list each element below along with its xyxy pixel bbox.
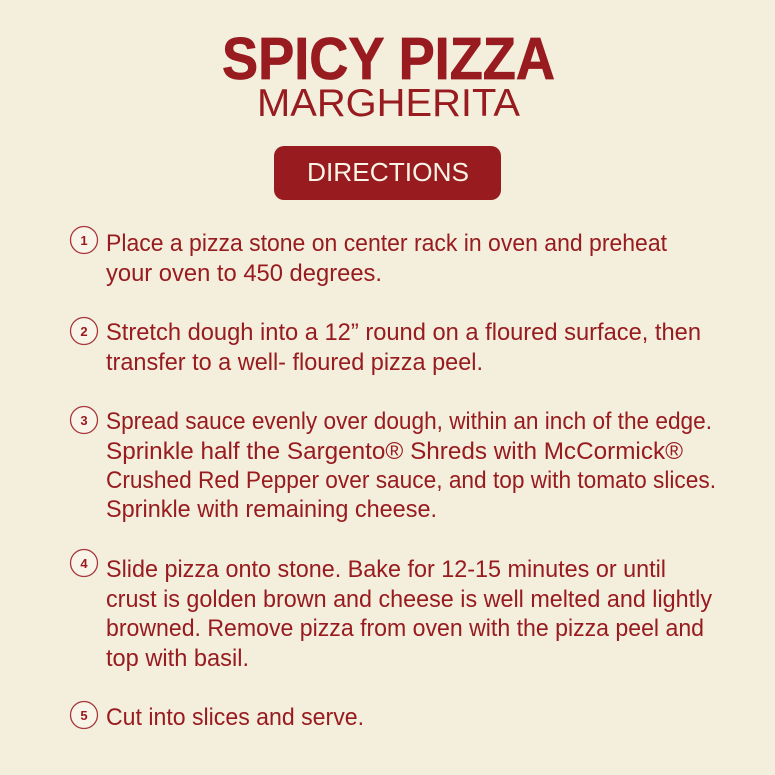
step 4 text: crust is golden brown and cheese is well melted and lightly bbox=[106, 586, 712, 613]
step 2 bbox=[70, 318, 701, 376]
step 4 text bbox=[106, 556, 712, 672]
icon: number 3 bbox=[70, 406, 98, 434]
icon: number 5: 5 bbox=[80, 708, 88, 723]
step 1 text: Place a pizza stone on center rack in oven and preheat bbox=[106, 230, 667, 257]
step 5 bbox=[70, 702, 364, 731]
step 4 text: Slide pizza onto stone. Bake for 12-15 minutes or until bbox=[106, 556, 666, 583]
icon: number 4 bbox=[70, 550, 98, 576]
heading: directions badge bbox=[274, 146, 501, 200]
heading: directions badge: DIRECTIONS bbox=[307, 159, 469, 187]
title: MARGHERITA bbox=[257, 82, 520, 125]
step 2 text bbox=[106, 319, 701, 376]
step 3 bbox=[70, 406, 716, 523]
step 1 text bbox=[106, 230, 667, 287]
step 4 bbox=[70, 550, 712, 672]
icon: number 5 bbox=[70, 702, 98, 728]
step 2 text: Stretch dough into a 12” round on a floured surface, then bbox=[106, 319, 701, 346]
step 3 text: Sprinkle half the Sargento® Shreds with McCormick® bbox=[106, 438, 683, 465]
step 2 text: transfer to a well- floured pizza peel. bbox=[106, 349, 483, 376]
icon: number 1: 1 bbox=[80, 233, 88, 248]
step 1 text: your oven to 450 degrees. bbox=[106, 260, 382, 287]
step 3 text: Crushed Red Pepper over sauce, and top with tomato slices. bbox=[106, 467, 716, 494]
icon: number 4: 4 bbox=[80, 556, 88, 571]
icon: number 3: 3 bbox=[80, 413, 88, 428]
step 1 bbox=[70, 226, 667, 287]
step 4 text: browned. Remove pizza from oven with the pizza peel and bbox=[106, 615, 704, 642]
title: SPICY PIZZA bbox=[222, 26, 555, 92]
icon: number 2: 2 bbox=[80, 324, 88, 339]
step 3 text: Sprinkle with remaining cheese. bbox=[106, 496, 437, 523]
step 3 text: Spread sauce evenly over dough, within an inch of the edge. bbox=[106, 408, 712, 435]
icon: number 2 bbox=[70, 318, 98, 344]
step 3 text bbox=[106, 408, 716, 523]
step 5 text: Cut into slices and serve. bbox=[106, 704, 364, 731]
icon: number 1 bbox=[70, 226, 98, 254]
step 4 text: top with basil. bbox=[106, 645, 249, 672]
title bbox=[222, 26, 555, 125]
